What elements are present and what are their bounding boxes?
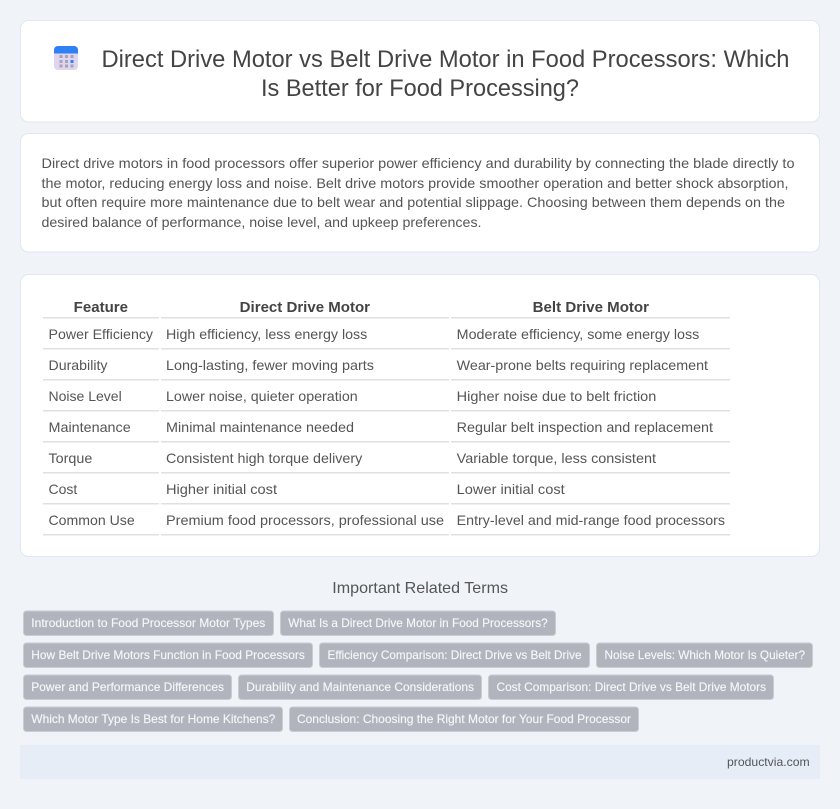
tag bbox=[280, 611, 556, 636]
row: durability: Wear-prone belts requiring replacement bbox=[457, 357, 708, 373]
row: common use bbox=[43, 512, 730, 536]
row: durability bbox=[43, 357, 730, 380]
tag: Power and Performance Differences bbox=[31, 680, 224, 694]
row: common use: Common Use bbox=[48, 512, 135, 528]
row: power efficiency: Power Efficiency bbox=[48, 326, 153, 342]
tag: What Is a Direct Drive Motor in Food Processors? bbox=[288, 616, 548, 630]
row: cost bbox=[43, 481, 730, 504]
row: noise level: Lower noise, quieter operation bbox=[166, 388, 358, 404]
tag bbox=[488, 675, 774, 700]
row: cost: Lower initial cost bbox=[457, 481, 565, 497]
footer source text: productvia.com bbox=[727, 755, 810, 769]
row: durability: Long-lasting, fewer moving parts bbox=[166, 357, 374, 373]
table header row: Direct Drive Motor bbox=[240, 299, 370, 316]
summary text: but often require more maintenance due to belt wear and potential slippage. Choosing between them depends on the bbox=[42, 194, 785, 210]
title bbox=[102, 46, 790, 102]
row: noise level: Higher noise due to belt friction bbox=[457, 388, 656, 404]
row: durability: Durability bbox=[48, 357, 108, 373]
tag: Efficiency Comparison: Direct Drive vs Belt Drive bbox=[328, 648, 582, 662]
row: cost: Cost bbox=[48, 481, 77, 497]
tag bbox=[24, 707, 282, 732]
icon: calendar bbox=[54, 46, 78, 70]
related term tags bbox=[24, 611, 812, 732]
row: power efficiency: Moderate efficiency, some energy loss bbox=[457, 326, 699, 342]
row: torque: Variable torque, less consistent bbox=[457, 450, 656, 466]
title: Is Better for Food Processing? bbox=[261, 75, 579, 102]
tag bbox=[596, 643, 812, 668]
row: maintenance: Minimal maintenance needed bbox=[166, 419, 354, 435]
panel: header bbox=[20, 20, 820, 122]
row: common use: Premium food processors, professional use bbox=[166, 512, 444, 528]
tag: How Belt Drive Motors Function in Food Processors bbox=[31, 648, 305, 662]
tag: Cost Comparison: Direct Drive vs Belt Drive Motors bbox=[496, 680, 766, 694]
table header row bbox=[43, 299, 730, 318]
row: torque: Consistent high torque delivery bbox=[166, 450, 362, 466]
heading: important related terms: Important Related Terms bbox=[332, 580, 508, 597]
tag bbox=[238, 675, 482, 700]
tag: Conclusion: Choosing the Right Motor for Your Food Processor bbox=[297, 712, 631, 726]
row: cost: Higher initial cost bbox=[166, 481, 277, 497]
row: noise level bbox=[43, 388, 730, 412]
panel: summary bbox=[20, 134, 820, 252]
row: power efficiency bbox=[43, 326, 730, 350]
row: maintenance: Maintenance bbox=[48, 419, 131, 435]
row: common use: Entry-level and mid-range food processors bbox=[457, 512, 725, 528]
title: Direct Drive Motor vs Belt Drive Motor in Food Processors: Which bbox=[102, 46, 790, 73]
tag: Durability and Maintenance Considerations bbox=[246, 680, 474, 694]
summary text: Direct drive motors in food processors offer superior power efficiency and durability by connecting the blade directly to bbox=[42, 155, 795, 171]
summary text: the motor, reducing energy loss and noise. Belt drive motors provide smoother operation and better shock absorption, bbox=[42, 175, 789, 191]
tag: Noise Levels: Which Motor Is Quieter? bbox=[604, 648, 805, 662]
row: maintenance: Regular belt inspection and replacement bbox=[457, 419, 713, 435]
row: torque bbox=[43, 450, 730, 474]
footer bar bbox=[20, 745, 820, 779]
tag bbox=[24, 675, 232, 700]
tag: Introduction to Food Processor Motor Types bbox=[31, 616, 265, 630]
panel: comparison table bbox=[20, 274, 820, 556]
table header row: Belt Drive Motor bbox=[533, 299, 649, 316]
tag: Which Motor Type Is Best for Home Kitchens? bbox=[31, 712, 276, 726]
summary text: desired balance of performance, noise level, and upkeep preferences. bbox=[42, 214, 482, 230]
summary text bbox=[42, 155, 795, 230]
row: noise level: Noise Level bbox=[48, 388, 122, 404]
row: torque: Torque bbox=[48, 450, 93, 466]
row: power efficiency: High efficiency, less energy loss bbox=[166, 326, 367, 342]
tag bbox=[290, 707, 638, 732]
tag bbox=[24, 611, 274, 636]
tag bbox=[24, 643, 312, 668]
row: maintenance bbox=[43, 419, 730, 442]
tag bbox=[320, 643, 590, 668]
table header row: Feature bbox=[74, 299, 128, 316]
